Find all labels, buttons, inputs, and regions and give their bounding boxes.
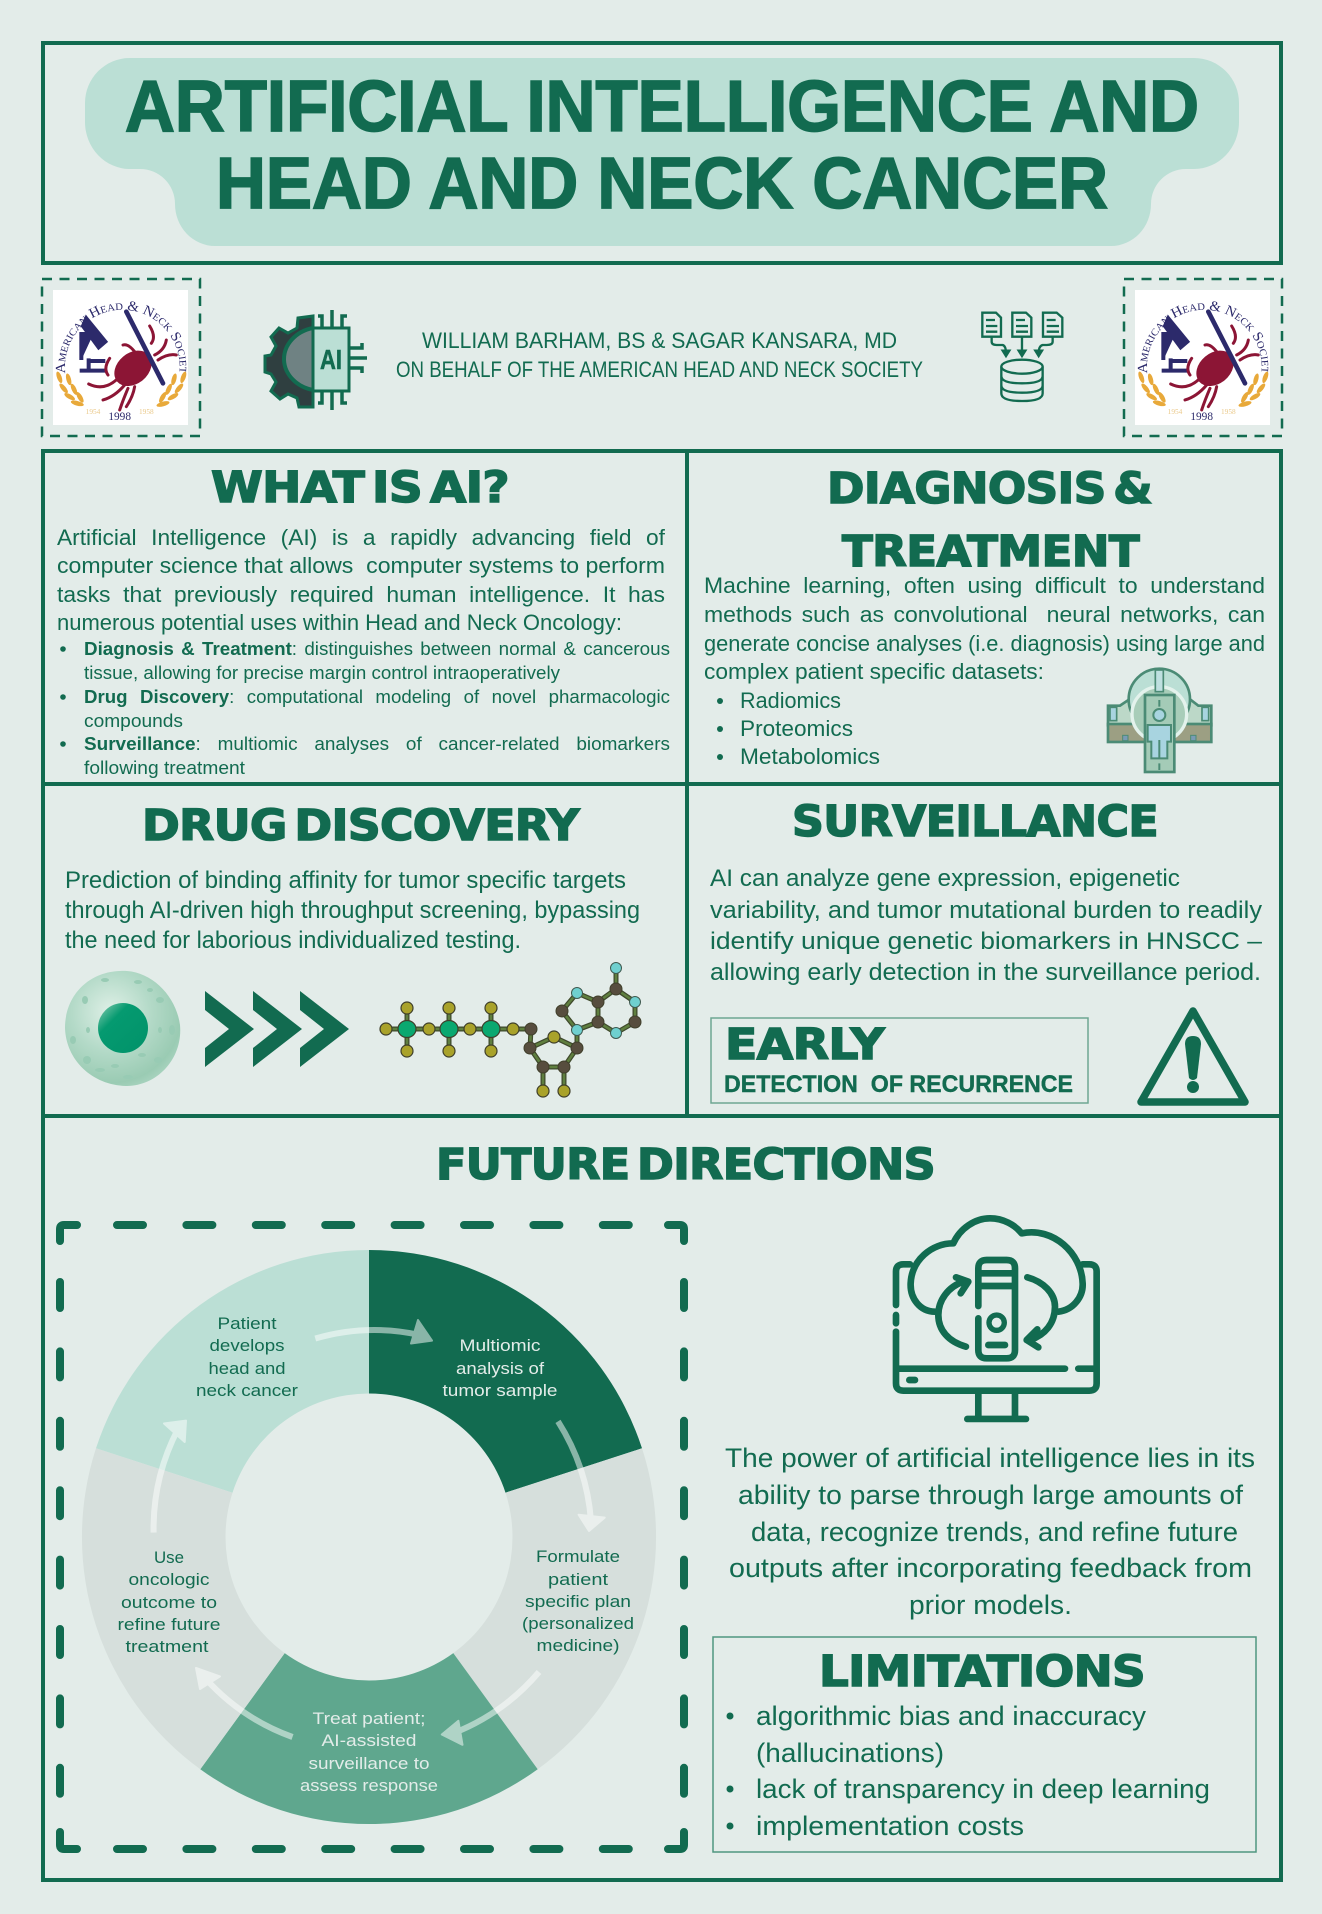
drug paragraph: through AI-driven high throughput screening, bypassing — [65, 897, 640, 924]
panel: drug discovery — [65, 802, 641, 1097]
left society logo: 1958 — [139, 407, 154, 416]
future directions paragraph: data, recognize trends, and refine future — [751, 1517, 1238, 1547]
label: treat patient: assess response — [300, 1776, 438, 1795]
label: use outcome: outcome to — [121, 1593, 217, 1612]
label: formulate plan: patient — [548, 1570, 608, 1589]
omics list: Metabolomics — [740, 744, 880, 769]
omics list: Proteomics — [740, 716, 853, 741]
label: formulate plan: medicine) — [536, 1636, 620, 1655]
surveillance paragraph: allowing early detection in the surveillance period. — [710, 959, 1261, 986]
label: formulate plan: (personalized — [522, 1614, 634, 1633]
bullet list: Drug Discovery : computational modeling of novel pharmacologic — [84, 687, 670, 707]
future directions paragraph: outputs after incorporating feedback from — [729, 1553, 1252, 1583]
segment: use outcome — [82, 1448, 285, 1769]
label: multiomic analysis: Multiomic — [460, 1336, 541, 1355]
label: patient develops: neck cancer — [196, 1381, 298, 1400]
bullet list: Surveillance : multiomic analyses of cancer-related biomarkers — [84, 734, 670, 754]
intro paragraph: computer science that allows computer systems to perform — [57, 553, 665, 578]
intro paragraph: numerous potential uses within Head and Neck Oncology: — [57, 610, 622, 635]
icon: cloud computer — [896, 1218, 1097, 1419]
diagnosis paragraph: generate concise analyses (i.e. diagnosis) using large and — [704, 631, 1265, 656]
callout: early detection — [711, 1018, 1088, 1103]
heading: future directions: FUTURE DIRECTIONS — [436, 1141, 935, 1190]
segment: treat patient — [200, 1653, 538, 1824]
authors: WILLIAM BARHAM, BS & SAGAR KANSARA, MD — [422, 328, 897, 353]
segment: formulate plan — [453, 1448, 656, 1769]
drug paragraph: the need for laborious individualized testing. — [65, 927, 521, 954]
surveillance paragraph: variability, and tumor mutational burden to readily — [710, 897, 1262, 924]
left society logo: 1954 — [86, 407, 101, 416]
label: use outcome: Use — [154, 1548, 184, 1567]
label: patient develops: head and — [208, 1359, 286, 1378]
icon: tumor cell — [65, 971, 180, 1086]
heading: surveillance: SURVEILLANCE — [792, 798, 1158, 847]
panel: limitations — [713, 1637, 1256, 1852]
panel: diagnosis and treatment — [704, 465, 1265, 772]
panel: future directions — [60, 1141, 1256, 1852]
label: multiomic analysis: analysis of — [456, 1359, 544, 1378]
bullet list: Diagnosis & Treatment : distinguishes between normal & cancerous — [84, 639, 670, 659]
bullet list — [60, 639, 670, 778]
omics list — [717, 688, 880, 769]
intro paragraph: tasks that previously required human intelligence. It has — [57, 582, 665, 607]
intro paragraph: Artificial Intelligence (AI) is a rapidly advancing field of — [57, 525, 666, 550]
segment: multiomic analysis — [369, 1250, 642, 1493]
diagnosis paragraph: methods such as convolutional neural networks, can — [704, 602, 1265, 627]
right society logo: 1954 — [1168, 407, 1183, 416]
label: multiomic analysis: tumor sample — [442, 1381, 558, 1400]
title text — [125, 67, 1199, 224]
label: patient develops: Patient — [218, 1314, 277, 1333]
diagnosis paragraph — [704, 573, 1265, 684]
icon: AI chip gear — [265, 310, 367, 410]
right society logo: 1998 — [1190, 411, 1213, 423]
right society logo: American Head & Neck Society — [1138, 301, 1268, 374]
heading: diagnosis and treatment — [827, 465, 1152, 577]
panel: surveillance — [710, 798, 1263, 1103]
label: multiomic analysis — [442, 1336, 558, 1400]
icon: molecule — [380, 962, 641, 1097]
label: treat patient: surveillance to — [308, 1754, 430, 1773]
label: use outcome: treatment — [126, 1637, 209, 1656]
callout: early detection: EARLY — [725, 1021, 886, 1070]
limitations list: (hallucinations) — [756, 1738, 944, 1768]
right society logo: 1958 — [1221, 407, 1236, 416]
main grid frame — [43, 451, 1281, 1880]
label: use outcome: oncologic — [128, 1570, 210, 1589]
bullet list: following treatment — [84, 758, 245, 778]
label: treat patient: Treat patient; — [312, 1709, 426, 1728]
limitations list: algorithmic bias and inaccuracy — [756, 1701, 1147, 1731]
diagnosis paragraph: Machine learning, often using difficult to understand — [704, 573, 1265, 598]
title frame — [43, 43, 1281, 263]
future directions paragraph: ability to parse through large amounts of — [738, 1480, 1244, 1510]
intro paragraph — [57, 525, 666, 635]
chart: treatment cycle ring — [82, 1250, 656, 1824]
drug paragraph — [65, 867, 640, 954]
panel: what is AI — [57, 464, 670, 778]
future directions paragraph: The power of artificial intelligence lies in its — [725, 1443, 1255, 1473]
heading: what is AI: WHAT IS AI? — [211, 464, 509, 513]
label: formulate plan: specific plan — [525, 1592, 631, 1611]
icon: warning triangle — [1141, 1011, 1245, 1102]
segment: patient develops cancer — [96, 1250, 369, 1493]
callout: early detection: DETECTION OF RECURRENCE — [724, 1071, 1073, 1098]
label: use outcome: refine future — [118, 1615, 220, 1634]
icon: AI chip gear: AI — [320, 344, 342, 375]
left society logo — [40, 278, 202, 438]
title banner — [43, 43, 1281, 263]
omics list: Radiomics — [740, 688, 841, 713]
heading: limitations: LIMITATIONS — [819, 1648, 1145, 1697]
title text: ARTIFICIAL INTELLIGENCE AND — [125, 67, 1199, 147]
heading: drug discovery: DRUG DISCOVERY — [142, 802, 581, 851]
surveillance paragraph: identify unique genetic biomarkers in HNSCC – — [710, 928, 1263, 955]
title text: HEAD AND NECK CANCER — [216, 144, 1108, 224]
icon: MRI scanner — [1108, 669, 1211, 772]
limitations list — [726, 1701, 1210, 1841]
arrows: chevrons — [205, 991, 349, 1067]
surveillance paragraph: AI can analyze gene expression, epigenetic — [710, 865, 1180, 892]
right society logo — [1122, 278, 1284, 438]
bullet list: tissue, allowing for precise margin control intraoperatively — [84, 663, 560, 683]
label: patient develops: develops — [210, 1336, 284, 1355]
label: formulate plan — [522, 1547, 634, 1655]
arrows: cycle flow — [154, 1320, 605, 1745]
label: patient develops — [196, 1314, 298, 1400]
drug paragraph: Prediction of binding affinity for tumor specific targets — [65, 867, 626, 894]
label: use outcome — [118, 1548, 220, 1656]
future directions paragraph — [725, 1443, 1255, 1620]
dashed cycle frame — [60, 1225, 684, 1849]
label: formulate plan: Formulate — [536, 1547, 620, 1566]
bullet list: compounds — [84, 711, 183, 731]
authors: ON BEHALF OF THE AMERICAN HEAD AND NECK SOCIETY — [396, 357, 923, 382]
authors — [396, 328, 923, 382]
diagnosis paragraph: complex patient specific datasets: — [704, 659, 1044, 684]
heading: diagnosis and treatment: TREATMENT — [842, 528, 1140, 577]
icon: documents into database — [982, 313, 1062, 401]
future directions paragraph: prior models. — [909, 1590, 1072, 1620]
heading: diagnosis and treatment: DIAGNOSIS & — [827, 465, 1152, 514]
limitations list: implementation costs — [756, 1811, 1024, 1841]
left society logo: 1998 — [108, 411, 131, 423]
label: treat patient — [300, 1709, 438, 1795]
title pill background — [85, 58, 1239, 246]
limitations list: lack of transparency in deep learning — [756, 1774, 1210, 1804]
surveillance paragraph — [710, 865, 1263, 986]
label: treat patient: AI-assisted — [322, 1731, 416, 1750]
